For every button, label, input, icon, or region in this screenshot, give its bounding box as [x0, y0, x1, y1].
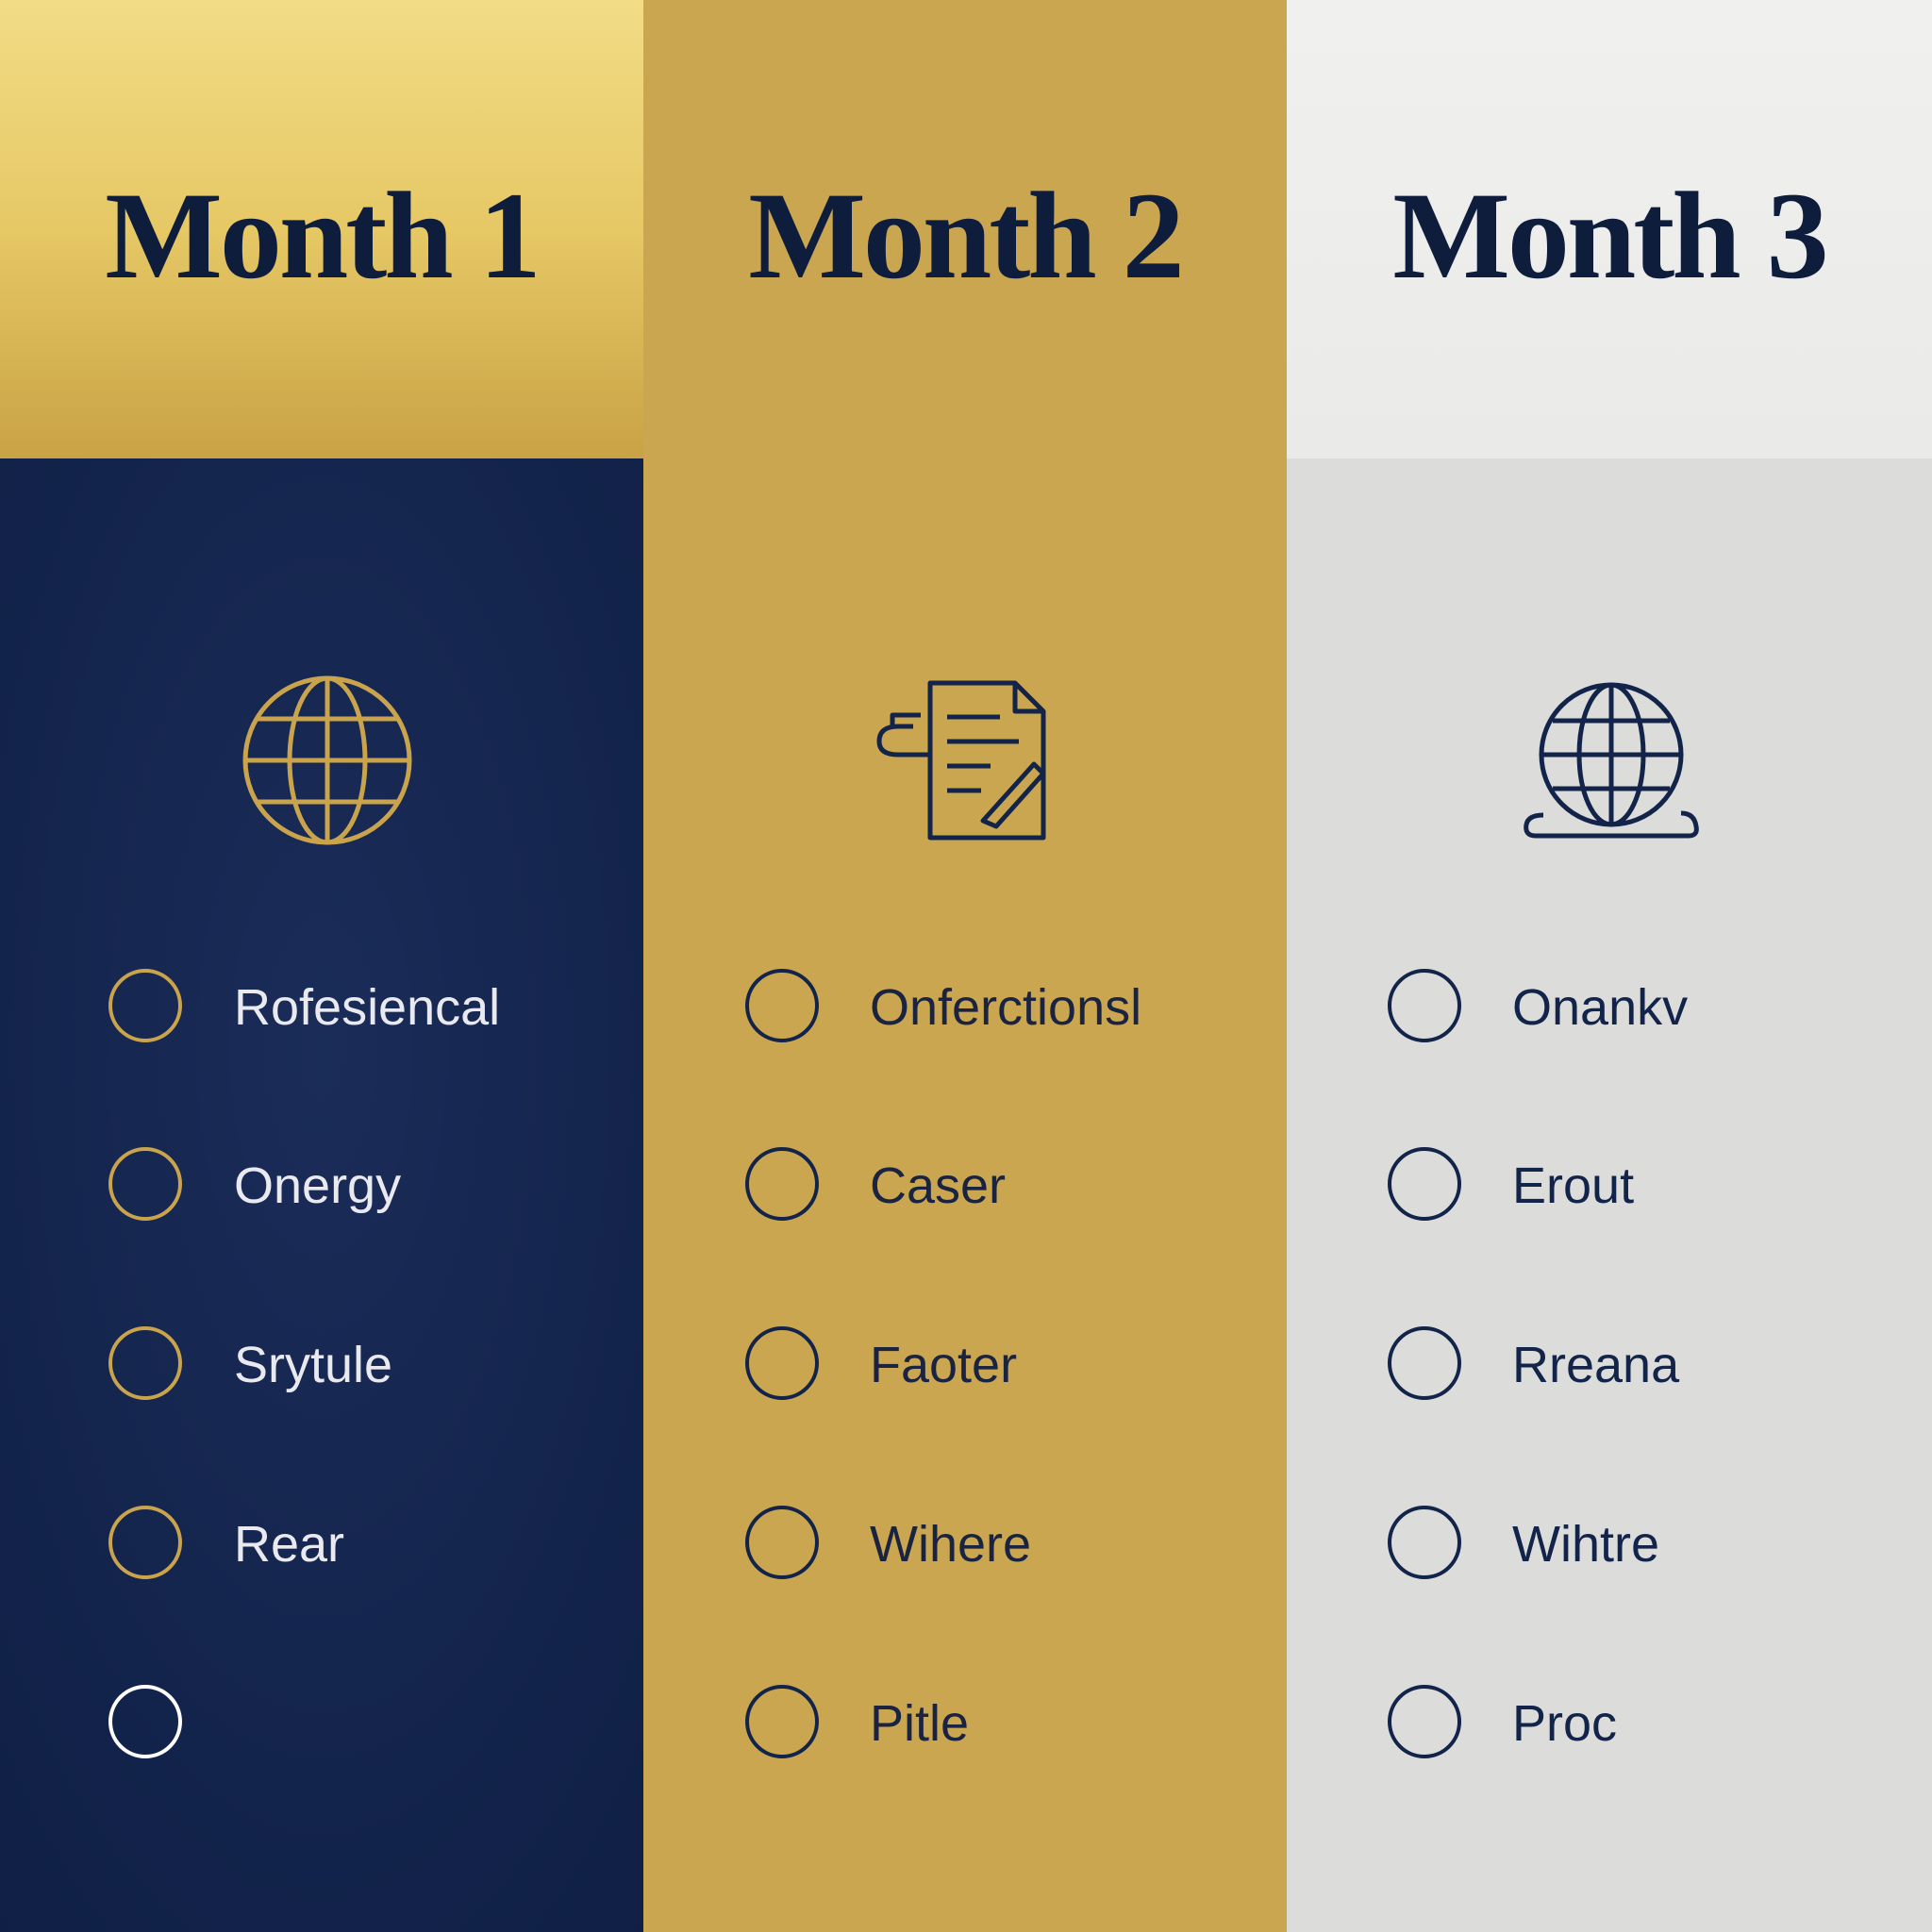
panel: month 1 header: [0, 0, 643, 458]
panel: month 2 body: [643, 458, 1287, 1932]
title: Month 1: Month 1: [105, 166, 539, 305]
list: month 1 items: Rofesiencal: [234, 979, 500, 1036]
panel: month 3 header: [1287, 0, 1932, 458]
icon: document: [879, 683, 1043, 838]
list: month 2 items: [747, 971, 1141, 1757]
list: month 1 items: [110, 971, 500, 1757]
list: month 3 items: Wihtre: [1512, 1516, 1659, 1573]
list: month 1 items: Onergy: [234, 1158, 401, 1214]
list: month 1 items: Rear: [234, 1516, 344, 1573]
list: month 1 items: Srytule: [234, 1337, 392, 1393]
panel: month 2 header: [643, 0, 1287, 458]
panel: month 3 body: [1287, 458, 1932, 1932]
list: month 3 items: Proc: [1512, 1695, 1617, 1752]
list: month 2 items: Wihere: [870, 1516, 1031, 1573]
list: month 2 items: Caser: [870, 1158, 1006, 1214]
icon: globe on cloud: [1526, 685, 1696, 836]
list: month 3 items: [1390, 971, 1688, 1757]
list: month 2 items: Onferctionsl: [870, 979, 1141, 1036]
list: month 3 items: Erout: [1512, 1158, 1634, 1214]
list: month 2 items: Faoter: [870, 1337, 1017, 1393]
icon: globe gold: [245, 678, 409, 842]
title: Month 3: Month 3: [1392, 166, 1826, 305]
list: month 2 items: Pitle: [870, 1695, 969, 1752]
panel: month 1 body: [0, 458, 643, 1932]
title: Month 2: Month 2: [748, 166, 1182, 305]
list: month 3 items: Onankv: [1512, 979, 1688, 1036]
list: month 3 items: Rreana: [1512, 1337, 1680, 1393]
